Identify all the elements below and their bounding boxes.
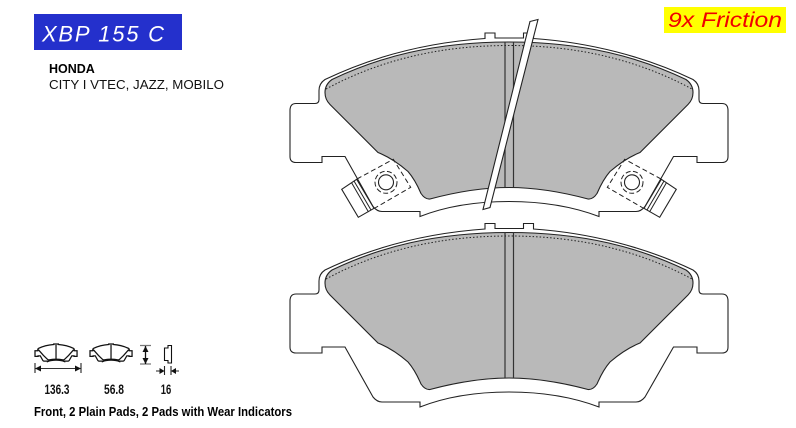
- dimension values: 16: [161, 382, 172, 397]
- dimension values: 136.3: [44, 382, 70, 397]
- upper centre slot: [505, 42, 514, 188]
- vehicle make and models: HONDA: [49, 62, 95, 76]
- part number badge: XBP 155 C: [41, 22, 164, 46]
- dimension values: 56.8: [104, 382, 124, 397]
- upper dotted wear line: [326, 46, 692, 89]
- lower friction material: [325, 232, 693, 390]
- part number badge: [34, 14, 182, 50]
- lower centre slot: [505, 232, 514, 378]
- lower backing plate: [290, 224, 728, 407]
- dimension icon: pad height: [90, 344, 151, 364]
- pad set description: Front, 2 Plain Pads, 2 Pads with Wear Indicators: [34, 404, 292, 419]
- upper friction material: [325, 42, 693, 199]
- vehicle make and models: CITY I VTEC, JAZZ, MOBILO: [49, 78, 224, 92]
- section cut band: [483, 20, 538, 210]
- friction grade badge: 9x Friction: [668, 9, 782, 32]
- upper backing plate: [290, 33, 728, 216]
- right wear indicator: [607, 159, 676, 217]
- left wear indicator: [342, 159, 411, 217]
- upper brake pad drawing: [290, 20, 728, 217]
- dimension icon: pad thickness: [156, 346, 179, 375]
- dimension icon: pad length: [35, 344, 81, 373]
- vehicle make and models: [49, 62, 224, 92]
- dimension values: [44, 382, 172, 397]
- lower dotted wear line: [326, 236, 692, 279]
- lower brake pad drawing: [290, 224, 728, 407]
